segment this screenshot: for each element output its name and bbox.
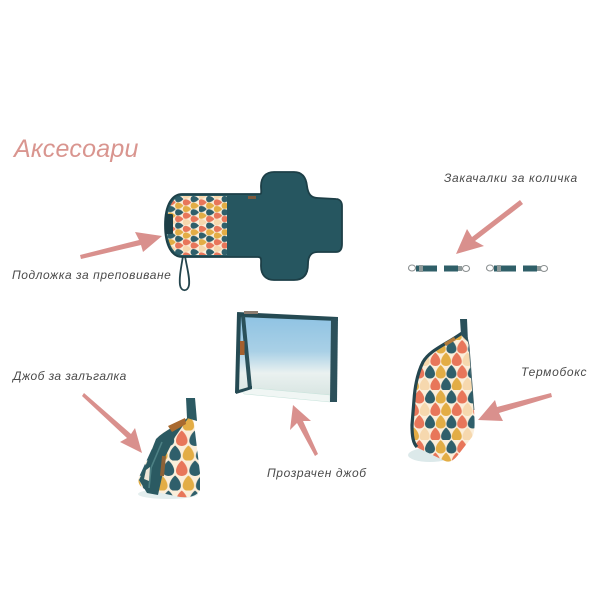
stroller clips <box>408 265 548 272</box>
pouch glass <box>236 316 333 400</box>
arrow: to thermobox <box>478 393 552 421</box>
title: Аксесоари <box>12 135 139 163</box>
mat leaf pattern <box>167 196 227 255</box>
pouch left edge <box>235 313 241 393</box>
pouch right edge <box>330 317 338 402</box>
transparent pouch <box>235 311 338 402</box>
mat closure tab <box>165 214 173 234</box>
pocket body <box>138 415 200 497</box>
label: thermobox: Термобокс <box>521 365 587 379</box>
thermobox zip pull <box>444 337 456 346</box>
mat strap <box>180 256 189 290</box>
pacifier pocket <box>138 398 200 499</box>
thermobox shadow <box>408 448 452 462</box>
thermobox zipper band <box>412 333 462 447</box>
pouch zip pull <box>240 341 244 355</box>
thermobox strap <box>460 319 468 342</box>
arrow: to stroller clips <box>456 200 523 254</box>
label: transparent pouch: Прозрачен джоб <box>267 466 367 480</box>
pocket zip pull <box>168 418 186 432</box>
pouch base <box>240 388 330 402</box>
pocket side gusset <box>139 417 189 495</box>
pocket cream patch <box>144 467 150 481</box>
mat label <box>248 196 256 199</box>
changing mat <box>165 172 342 290</box>
thermobox body <box>412 333 475 462</box>
clip 1 <box>408 265 437 272</box>
thermobox <box>408 319 475 462</box>
arrow: to transparent pouch <box>290 405 318 456</box>
clip 3 <box>486 265 516 272</box>
pouch top band <box>237 312 338 321</box>
thermobox right edge <box>467 336 474 410</box>
arrow: to pacifier pocket <box>82 393 142 453</box>
pouch left gusset <box>241 316 252 389</box>
clip 4 <box>523 266 548 272</box>
pouch base left corner <box>235 386 252 394</box>
pouch top tab <box>244 311 258 314</box>
pocket strap <box>186 398 197 421</box>
clip 2 <box>444 266 470 272</box>
pocket brand tab <box>160 456 166 476</box>
pocket shadow <box>138 489 198 499</box>
arrow: to changing mat <box>80 232 162 259</box>
label: pacifier pocket: Джоб за залъгалка <box>11 369 127 383</box>
label: stroller clips: Закачалки за количка <box>444 171 578 185</box>
mat body <box>165 172 342 280</box>
label: changing mat: Подложка за преповиване <box>12 268 171 282</box>
pocket gusset stripe <box>149 442 162 488</box>
